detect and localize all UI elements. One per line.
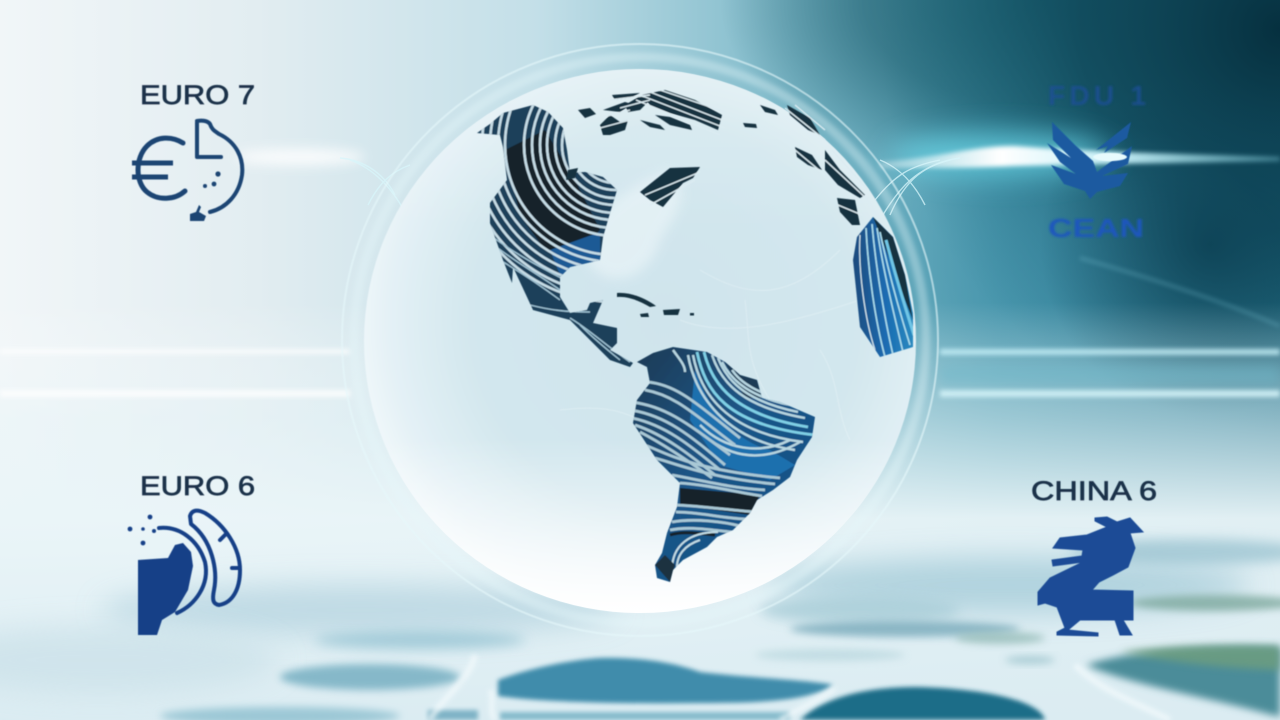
label: EURO 7: EURO 7 [140,80,255,110]
label: obscured top standard: FDU 1 [1048,80,1146,111]
map: North America [476,104,634,368]
light streaks [0,133,1280,397]
label: obscured lower standard: CEAN [1048,213,1144,243]
icon: euro 6 gauge [128,511,240,635]
icon: dragon [1038,517,1143,636]
globe rings [342,44,938,636]
icon: euro clock [132,121,242,221]
map: Arctic islands and Greenland [566,90,868,225]
globe [364,68,916,613]
map: Caribbean islands [617,293,694,317]
label: EURO 6: EURO 6 [140,471,255,501]
label: CHINA 6: CHINA 6 [1031,476,1157,506]
icon: eagle shield [1047,122,1132,199]
water reflections [0,539,1280,720]
map: South America [630,347,815,582]
eagle highlight [1093,153,1127,161]
map: Africa and Europe edge [853,217,914,357]
